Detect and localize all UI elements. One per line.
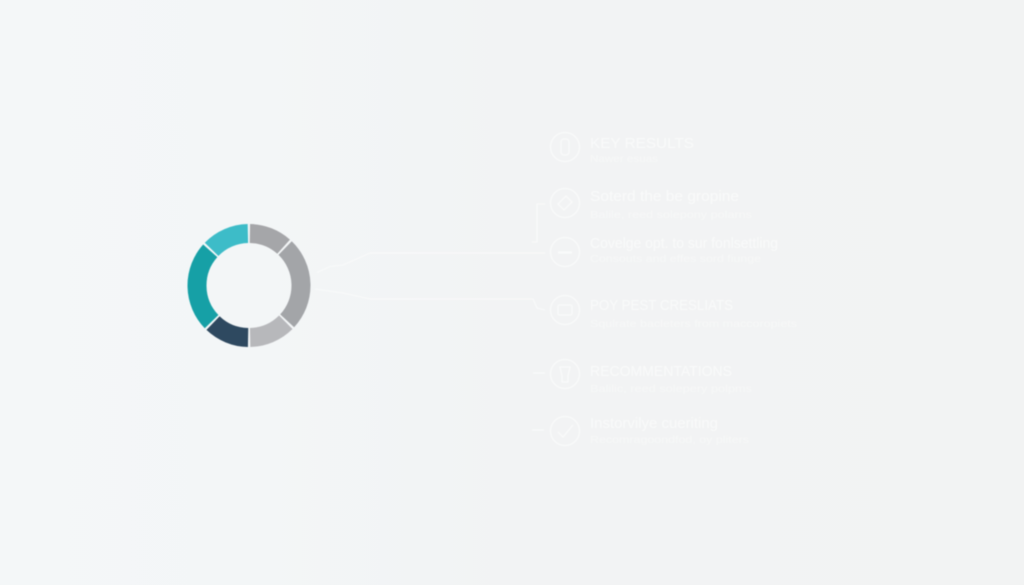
heading: Covelge opt. to sur fonlsettling xyxy=(590,235,778,252)
description: Balilic, reed solepery polpms xyxy=(590,383,752,395)
heading: POY PEST CRESLIATS xyxy=(590,297,733,314)
heading: Soterd the be gropine xyxy=(590,188,739,205)
connector lines xyxy=(315,204,545,430)
heading: RECOMMENTATIONS xyxy=(590,363,732,380)
description: Squlrate bacleters from maccoropiets xyxy=(590,318,797,330)
item: coverage xyxy=(550,235,778,266)
icon: minus xyxy=(550,238,580,266)
description: Nawer esuas xyxy=(590,153,658,165)
donut chart xyxy=(175,212,323,359)
item: instructive xyxy=(550,415,749,446)
description: Consouts and effes sord fiunge xyxy=(590,253,761,265)
icon: phone xyxy=(550,132,580,162)
icon: folder xyxy=(550,296,580,324)
item: recommendations xyxy=(550,360,752,395)
icon: diamond tag xyxy=(550,188,580,218)
description: Recomragoondfod, oy pliters xyxy=(590,434,749,446)
list of results xyxy=(550,132,797,446)
item: key results xyxy=(550,132,694,165)
item: selected group xyxy=(550,188,752,221)
item: post results xyxy=(550,296,797,330)
icon: check mark xyxy=(550,416,580,446)
description: Balile, reed solepony polarns xyxy=(590,209,752,221)
heading: Instorvilye cueriting xyxy=(590,415,718,432)
icon: cup xyxy=(550,360,580,388)
heading: KEY RESULTS xyxy=(590,135,694,152)
